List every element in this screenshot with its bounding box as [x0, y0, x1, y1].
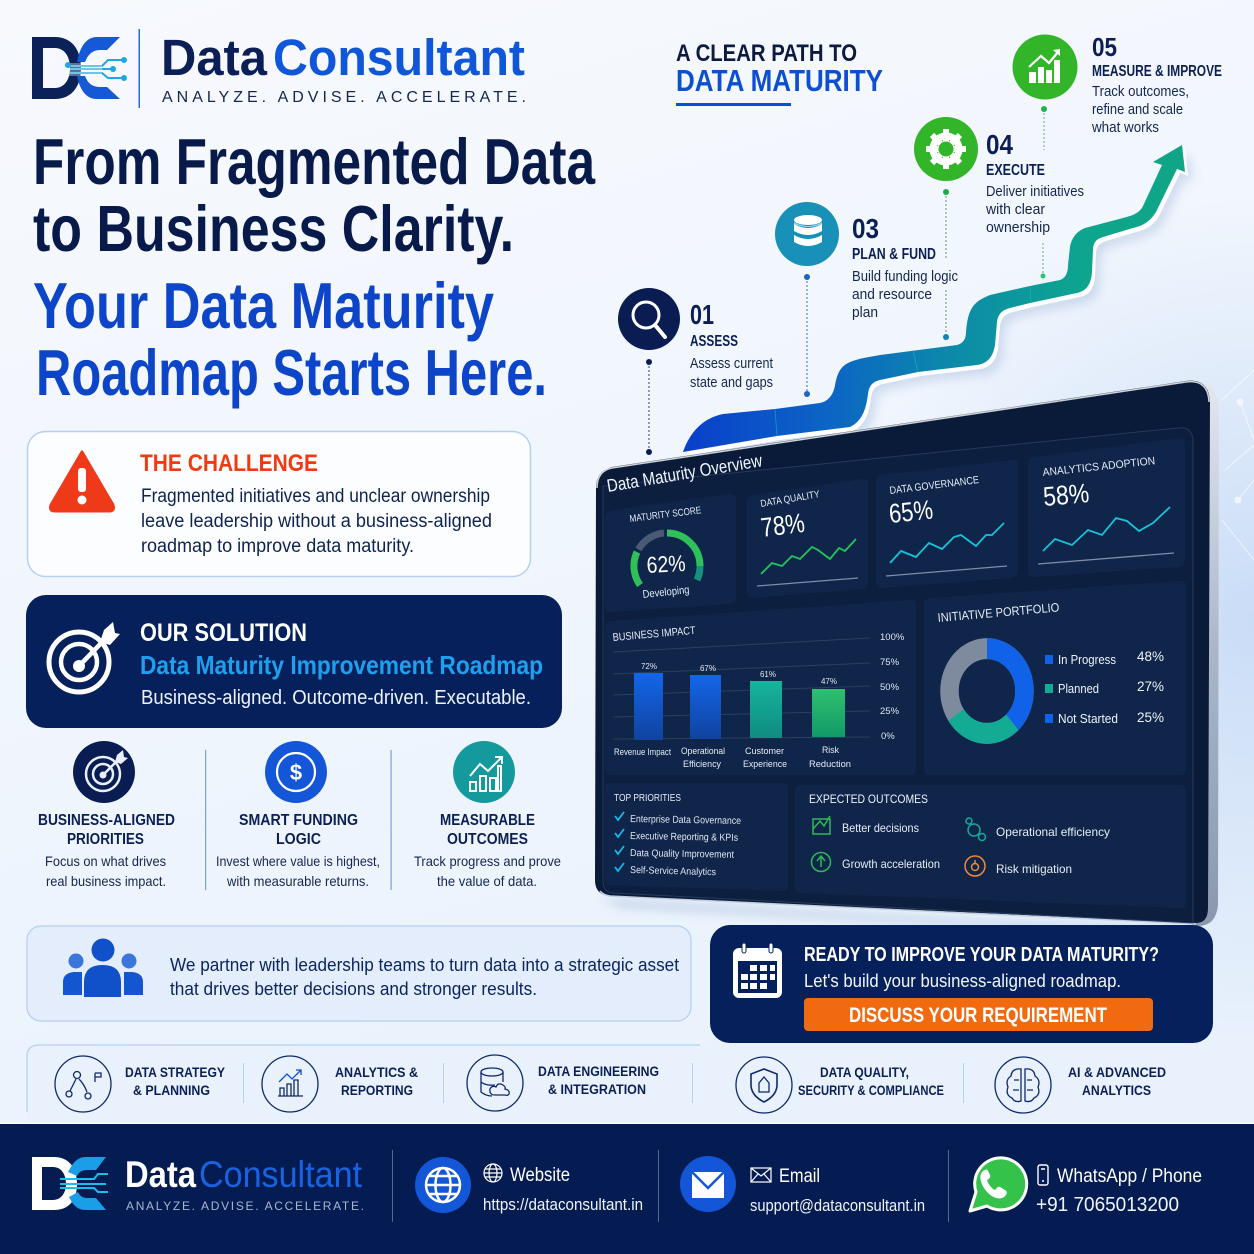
challenge text: [141, 486, 492, 557]
brand name: [161, 29, 525, 86]
pillar text: OUTCOMES: [447, 831, 528, 848]
service: analytics and reporting: ANALYTICS &: [335, 1065, 418, 1080]
bar chart: Efficiency: [683, 759, 721, 770]
service: data quality: [736, 1057, 944, 1113]
service: ai: AI & ADVANCED: [1068, 1065, 1166, 1080]
connector 03: [804, 274, 810, 397]
tagline: ANALYZE. ADVISE. ACCELERATE.: [162, 89, 526, 106]
challenge text: roadmap to improve data maturity.: [141, 536, 414, 557]
headline: [33, 125, 596, 409]
card: data quality: [747, 479, 868, 598]
icon: operational efficiency: [966, 818, 986, 840]
cta text: Let's build your business-aligned roadmap.: [804, 971, 1121, 991]
panel: expected outcomes: [795, 785, 1186, 908]
cta button: [804, 998, 1153, 1031]
bar chart: Experience: [743, 759, 787, 770]
card: maturity score: MATURITY SCORE: [629, 505, 702, 525]
icon: people: [63, 938, 143, 997]
card: data governance: 65%: [887, 495, 934, 529]
text 01: Assess current: [690, 355, 774, 372]
icon: chart badge: [453, 741, 515, 803]
partnership text: We partner with leadership teams to turn data into a strategic asset: [170, 955, 679, 975]
service: data engineering: DATA ENGINEERING: [538, 1064, 659, 1079]
text 03: Build funding logic: [852, 268, 958, 285]
step 05: measure and improve: [1012, 32, 1222, 278]
card: analytics adoption: [1028, 438, 1185, 577]
service: analytics and reporting: [262, 1056, 418, 1112]
service: data engineering: [467, 1055, 659, 1111]
text 03: PLAN & FUND: [852, 246, 936, 263]
checklist: Data Quality Improvement: [630, 848, 734, 861]
bar chart: 61%: [760, 670, 776, 679]
solution text: OUR SOLUTION: [140, 619, 307, 647]
pillar: business-aligned priorities: [38, 741, 175, 889]
partnership text: that drives better decisions and stronger results.: [170, 979, 537, 999]
pillar: smart funding logic: [216, 741, 380, 889]
card: data quality: DATA QUALITY: [760, 489, 821, 510]
bar chart: Customer: [745, 746, 784, 757]
pillar text: Focus on what drives: [45, 853, 166, 869]
pillar divider: [205, 750, 206, 890]
service: ai: ANALYTICS: [1082, 1083, 1151, 1098]
icon: whatsapp: [970, 1158, 1027, 1211]
icon: globe: [415, 1157, 471, 1213]
bar chart: 47%: [821, 677, 837, 686]
sparkline: [761, 539, 856, 574]
icon: warning triangle: [50, 452, 114, 511]
headline: From Fragmented Data: [33, 125, 596, 198]
text 01: [690, 299, 774, 391]
text 05: 05: [1092, 32, 1117, 62]
legend: [1045, 649, 1164, 726]
headline: Your Data Maturity: [33, 269, 494, 342]
text 01: 01: [690, 299, 714, 330]
cta text: [804, 944, 1159, 991]
bar chart: 100%: [880, 632, 905, 643]
panel: expected outcomes: Growth acceleration: [842, 857, 940, 871]
icon: growth acceleration: [812, 852, 830, 872]
icon: database cloud: [467, 1055, 523, 1111]
bar chart: 72%: [641, 662, 657, 671]
icon: strategy: [55, 1056, 111, 1112]
checklist: Executive Reporting & KPIs: [630, 831, 738, 844]
card: data quality: 78%: [759, 508, 806, 543]
icon: gear: [926, 129, 966, 169]
pillar text: [216, 812, 380, 889]
panel: expected outcomes: Operational efficiency: [996, 825, 1110, 839]
dashboard title: Data Maturity Overview: [605, 450, 764, 496]
panel: expected outcomes: EXPECTED OUTCOMES: [809, 792, 928, 806]
icon: calendar: [734, 943, 781, 997]
legend: In Progress: [1058, 652, 1116, 667]
panel: the challenge: [28, 432, 530, 576]
icon: analytics: [262, 1056, 318, 1112]
chart: donut: [950, 649, 1024, 733]
text 05: what works: [1091, 119, 1159, 136]
bar chart: Risk: [822, 745, 839, 756]
pillar text: MEASURABLE: [440, 812, 535, 829]
icon: shield: [736, 1057, 792, 1113]
dashboard frame: [595, 380, 1219, 938]
panel: services strip: [0, 1045, 1254, 1124]
pillar text: [414, 812, 561, 889]
step 04: execute: [914, 117, 1084, 340]
bar chart: 0%: [881, 731, 895, 742]
solution text: Data Maturity Improvement Roadmap: [140, 650, 543, 680]
logo divider: [138, 29, 140, 108]
text 04: [985, 129, 1084, 236]
bar chart: Operational: [681, 746, 725, 757]
brand name: Data: [161, 29, 268, 86]
card: analytics adoption: 58%: [1042, 478, 1090, 512]
icon: bars with arrow: [1029, 49, 1060, 83]
panel: top priorities: [605, 783, 788, 891]
text 03: and resource: [852, 286, 932, 303]
headline: Roadmap Starts Here.: [36, 336, 547, 409]
section title: a clear path: DATA MATURITY: [676, 63, 883, 98]
bar chart: 75%: [880, 657, 900, 668]
pillar text: Invest where value is highest,: [216, 853, 380, 869]
panel: our solution: [26, 595, 562, 728]
section title: a clear path: A CLEAR PATH TO: [676, 40, 857, 67]
text 05: [1091, 32, 1222, 136]
checklist: [615, 812, 742, 878]
section title: a clear path: [676, 40, 883, 106]
service: data engineering: & INTEGRATION: [548, 1082, 646, 1097]
step 01: assess: [618, 288, 774, 455]
icon: magnifier: [633, 302, 665, 337]
cta text: READY TO IMPROVE YOUR DATA MATURITY?: [804, 944, 1159, 966]
bar chart: Reduction: [809, 759, 851, 770]
icon: brain: [995, 1057, 1051, 1113]
footer: [0, 1124, 1254, 1254]
text 01: ASSESS: [690, 333, 738, 350]
cta button: DISCUSS YOUR REQUIREMENT: [849, 1004, 1107, 1027]
pillar text: [38, 812, 175, 889]
icon: dollar badge: $: [290, 760, 302, 785]
bar chart: 50%: [880, 682, 900, 693]
bar chart: Revenue Impact: [614, 747, 671, 758]
card: maturity score: 62%: [646, 550, 686, 578]
card: maturity score: [605, 494, 736, 612]
panel: business impact: [605, 600, 916, 775]
pillar text: the value of data.: [437, 873, 537, 889]
card: analytics adoption: ANALYTICS ADOPTION: [1042, 455, 1156, 479]
legend: 25%: [1137, 710, 1164, 725]
checklist: Self-Service Analytics: [630, 865, 716, 878]
panel: partnership statement: [27, 926, 691, 1021]
pillar text: PRIORITIES: [67, 831, 144, 848]
pillar text: LOGIC: [276, 831, 321, 848]
service: data quality: DATA QUALITY,: [820, 1065, 909, 1080]
text 03: plan: [852, 304, 878, 321]
solution text: Business-aligned. Outcome-driven. Executable.: [141, 687, 531, 709]
contact: email: support@dataconsultant.in: [750, 1196, 925, 1215]
text 04: Deliver initiatives: [986, 183, 1084, 200]
connector 01: [646, 359, 652, 455]
panel: business impact: BUSINESS IMPACT: [612, 625, 696, 644]
card: data governance: DATA GOVERNANCE: [889, 474, 980, 497]
dashboard: [595, 380, 1219, 938]
contact: email: Email: [779, 1166, 820, 1187]
pillar text: Track progress and prove: [414, 853, 561, 869]
chart: gauge: [634, 533, 700, 585]
text 04: with clear: [985, 201, 1045, 218]
text 04: EXECUTE: [986, 162, 1045, 179]
brand name: footer: Data: [125, 1154, 196, 1195]
icon: envelope: [680, 1156, 736, 1212]
icon: database: [794, 215, 822, 246]
text 05: Track outcomes,: [1092, 83, 1189, 100]
text 03: [852, 213, 958, 321]
bar chart: [614, 632, 905, 770]
service: data quality: SECURITY & COMPLIANCE: [798, 1083, 944, 1098]
contact: website: https://dataconsultant.in: [483, 1195, 643, 1214]
pillar divider: [390, 750, 392, 890]
service: analytics and reporting: REPORTING: [341, 1083, 413, 1098]
challenge text: Fragmented initiatives and unclear ownership: [141, 486, 490, 507]
legend: Planned: [1058, 681, 1099, 696]
panel: expected outcomes: Risk mitigation: [996, 862, 1072, 876]
service: data strategy: [55, 1056, 225, 1112]
panel: call to action: [710, 925, 1213, 1043]
bar chart: 67%: [700, 664, 716, 673]
checklist: Enterprise Data Governance: [630, 814, 742, 827]
text 04: ownership: [986, 219, 1050, 236]
service: data strategy: DATA STRATEGY: [125, 1065, 225, 1080]
sparkline: [890, 523, 1004, 563]
brand name: Consultant: [273, 29, 525, 86]
contact: email: [680, 1156, 925, 1215]
text 01: state and gaps: [690, 374, 773, 391]
panel: initiative portfolio: INITIATIVE PORTFOLIO: [937, 600, 1060, 625]
icon: target badge: [73, 741, 135, 803]
service: ai: [995, 1057, 1166, 1113]
pillar text: real business impact.: [46, 873, 166, 889]
headline: to Business Clarity.: [33, 192, 514, 265]
contact: whatsapp: +91 7065013200: [1036, 1194, 1179, 1216]
step 03: plan and fund: [775, 202, 958, 397]
arrow: maturity road: [683, 145, 1193, 462]
brand name: footer: ANALYZE. ADVISE. ACCELERATE.: [126, 1199, 364, 1213]
card: maturity score: Developing: [642, 584, 690, 601]
pillar text: BUSINESS-ALIGNED: [38, 812, 175, 829]
icon: better decisions: [813, 816, 830, 834]
legend: 27%: [1137, 679, 1164, 694]
text 05: refine and scale: [1092, 101, 1183, 118]
brand name: footer: Consultant: [199, 1154, 363, 1195]
card: data governance: [876, 460, 1018, 588]
pillar: measurable outcomes: [414, 741, 561, 889]
pillar text: SMART FUNDING: [239, 812, 358, 829]
legend: Not Started: [1058, 711, 1118, 726]
pillar text: with measurable returns.: [226, 873, 369, 889]
contact: website: Website: [510, 1165, 570, 1186]
panel: initiative portfolio: [924, 581, 1186, 775]
panel: top priorities: TOP PRIORITIES: [614, 793, 681, 804]
service: data strategy: & PLANNING: [133, 1083, 210, 1098]
sparkline: [1043, 507, 1170, 551]
text 03: 03: [852, 213, 879, 244]
bar chart: 25%: [880, 706, 900, 717]
contact: whatsapp: WhatsApp / Phone: [1057, 1166, 1202, 1187]
panel: expected outcomes: Better decisions: [842, 821, 919, 835]
icon: risk mitigation: [965, 856, 985, 876]
connector 05: [1040, 106, 1047, 278]
legend: 48%: [1137, 649, 1164, 664]
logo: footer: [32, 1157, 108, 1210]
brand name: footer: [125, 1154, 364, 1213]
icon: dollar badge: [265, 741, 327, 803]
challenge heading: THE CHALLENGE: [140, 450, 318, 477]
logo: header: [32, 37, 127, 99]
icon: target: [49, 622, 120, 692]
contact: website: [415, 1157, 643, 1214]
partnership text: [170, 955, 679, 999]
challenge text: leave leadership without a business-aligned: [141, 511, 492, 532]
contact: whatsapp: [970, 1158, 1202, 1216]
solution text: [140, 619, 543, 709]
connector 04: [943, 189, 949, 340]
text 04: 04: [986, 129, 1013, 160]
